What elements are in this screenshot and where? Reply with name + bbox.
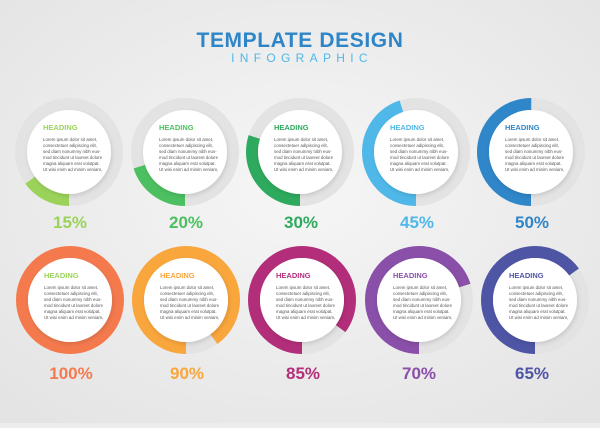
item 50%: Ut wisi enim ad minim veniam, xyxy=(505,167,564,172)
item 15%: 15% xyxy=(53,213,87,232)
item 50%: Lorem ipsum dolor sit amet, xyxy=(505,137,559,142)
item 85%: HEADING xyxy=(276,271,311,280)
item 30%: mod tincidunt ut laoreet dolore xyxy=(274,155,334,160)
item 20%: Lorem ipsum dolor sit amet, xyxy=(159,137,213,142)
item 15%: sed diam nonummy nibh eus- xyxy=(43,149,101,154)
item 15%: magna aliquam erat volutpat. xyxy=(43,161,100,166)
item 45%: HEADING xyxy=(390,123,425,132)
item 15%: HEADING xyxy=(43,123,78,132)
item 45%: sed diam nonummy nibh eus- xyxy=(390,149,448,154)
item 85%: Lorem ipsum dolor sit amet, xyxy=(276,285,330,290)
item 65% xyxy=(487,252,583,383)
item 70%: consectetuer adipiscing elit, xyxy=(393,291,447,296)
item 30%: sed diam nonummy nibh eus- xyxy=(274,149,332,154)
item 90%: Lorem ipsum dolor sit amet, xyxy=(160,285,214,290)
item 50%: consectetuer adipiscing elit, xyxy=(505,143,559,148)
item 15%: Ut wisi enim ad minim veniam, xyxy=(43,167,102,172)
item 85%: Ut wisi enim ad minim veniam, xyxy=(276,315,335,320)
item 15% xyxy=(21,104,117,232)
item 20%: magna aliquam erat volutpat. xyxy=(159,161,216,166)
item 30%: Ut wisi enim ad minim veniam, xyxy=(274,167,333,172)
item 50%: sed diam nonummy nibh eus- xyxy=(505,149,563,154)
item 45%: magna aliquam erat volutpat. xyxy=(390,161,447,166)
item 90% xyxy=(138,252,234,383)
item 65%: Ut wisi enim ad minim veniam, xyxy=(509,315,568,320)
item 85% xyxy=(254,252,350,383)
item 70%: mod tincidunt ut laoreet dolore xyxy=(393,303,453,308)
title: TEMPLATE DESIGN xyxy=(197,29,403,52)
item 100%: mod tincidunt ut laoreet dolore xyxy=(44,303,104,308)
item 70%: Ut wisi enim ad minim veniam, xyxy=(393,315,452,320)
item 45%: 45% xyxy=(400,213,434,232)
item 45% xyxy=(368,104,464,232)
item 50%: HEADING xyxy=(505,123,540,132)
item 30%: 30% xyxy=(284,213,318,232)
item 30% xyxy=(252,104,348,232)
item 65%: Lorem ipsum dolor sit amet, xyxy=(509,285,563,290)
item 85%: sed diam nonummy nibh eus- xyxy=(276,297,334,302)
item 90%: magna aliquam erat volutpat. xyxy=(160,309,217,314)
item 20%: HEADING xyxy=(159,123,194,132)
item 50%: 50% xyxy=(515,213,549,232)
item 15%: Lorem ipsum dolor sit amet, xyxy=(43,137,97,142)
item 100%: sed diam nonummy nibh eus- xyxy=(44,297,102,302)
item 90%: HEADING xyxy=(160,271,195,280)
item 65%: sed diam nonummy nibh eus- xyxy=(509,297,567,302)
item 70% xyxy=(371,252,467,383)
item 15%: mod tincidunt ut laoreet dolore xyxy=(43,155,103,160)
item 90%: sed diam nonummy nibh eus- xyxy=(160,297,218,302)
item 45%: Ut wisi enim ad minim veniam, xyxy=(390,167,449,172)
item 20%: Ut wisi enim ad minim veniam, xyxy=(159,167,218,172)
item 30%: HEADING xyxy=(274,123,309,132)
item 30%: consectetuer adipiscing elit, xyxy=(274,143,328,148)
item 90%: Ut wisi enim ad minim veniam, xyxy=(160,315,219,320)
item 70%: Lorem ipsum dolor sit amet, xyxy=(393,285,447,290)
item 20%: sed diam nonummy nibh eus- xyxy=(159,149,217,154)
item 85%: magna aliquam erat volutpat. xyxy=(276,309,333,314)
item 20% xyxy=(137,104,233,232)
item 65%: magna aliquam erat volutpat. xyxy=(509,309,566,314)
item 70%: 70% xyxy=(402,364,436,383)
item 70%: sed diam nonummy nibh eus- xyxy=(393,297,451,302)
item 70%: magna aliquam erat volutpat. xyxy=(393,309,450,314)
item 45%: mod tincidunt ut laoreet dolore xyxy=(390,155,450,160)
item 85%: mod tincidunt ut laoreet dolore xyxy=(276,303,336,308)
item 100%: Ut wisi enim ad minim veniam, xyxy=(44,315,103,320)
item 100% xyxy=(22,252,118,383)
item 20%: 20% xyxy=(169,213,203,232)
item 45%: consectetuer adipiscing elit, xyxy=(390,143,444,148)
item 65%: consectetuer adipiscing elit, xyxy=(509,291,563,296)
item 100%: Lorem ipsum dolor sit amet, xyxy=(44,285,98,290)
item 100%: HEADING xyxy=(44,271,79,280)
item 85%: 85% xyxy=(286,364,320,383)
item 20%: mod tincidunt ut laoreet dolore xyxy=(159,155,219,160)
item 65%: mod tincidunt ut laoreet dolore xyxy=(509,303,569,308)
item 65%: 65% xyxy=(515,364,549,383)
item 90%: mod tincidunt ut laoreet dolore xyxy=(160,303,220,308)
item 30%: magna aliquam erat volutpat. xyxy=(274,161,331,166)
item 100%: consectetuer adipiscing elit, xyxy=(44,291,98,296)
item 90%: consectetuer adipiscing elit, xyxy=(160,291,214,296)
item 85%: consectetuer adipiscing elit, xyxy=(276,291,330,296)
item 50% xyxy=(483,104,579,232)
item 100%: magna aliquam erat volutpat. xyxy=(44,309,101,314)
item 50%: mod tincidunt ut laoreet dolore xyxy=(505,155,565,160)
item 100%: 100% xyxy=(49,364,93,383)
item 45%: Lorem ipsum dolor sit amet, xyxy=(390,137,444,142)
item 90%: 90% xyxy=(170,364,204,383)
subtitle: INFOGRAPHIC xyxy=(231,51,373,65)
item 65%: HEADING xyxy=(509,271,544,280)
item 20%: consectetuer adipiscing elit, xyxy=(159,143,213,148)
item 15%: consectetuer adipiscing elit, xyxy=(43,143,97,148)
item 50%: magna aliquam erat volutpat. xyxy=(505,161,562,166)
item 30%: Lorem ipsum dolor sit amet, xyxy=(274,137,328,142)
item 70%: HEADING xyxy=(393,271,428,280)
